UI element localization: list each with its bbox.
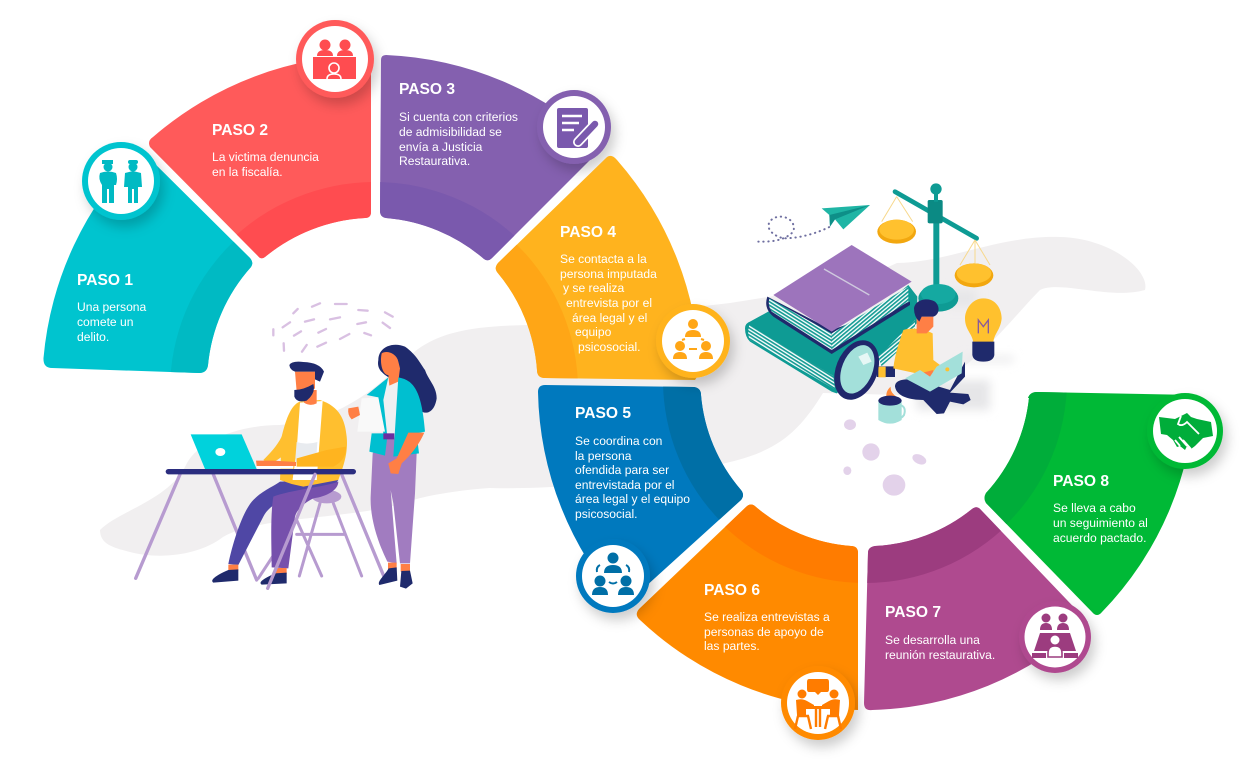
text: paso 6: personas de apoyo de — [704, 625, 824, 639]
panel: paso 4 — [496, 156, 740, 390]
decorative purple spots — [843, 419, 928, 496]
illustration: books, scale and student — [745, 183, 1013, 496]
stacked books — [745, 245, 917, 393]
text: paso 4: Se contacta a la — [560, 252, 647, 266]
light bulb — [965, 298, 1002, 362]
text: paso 4: entrevista por el — [566, 296, 652, 310]
text: paso 3: Si cuenta con criterios — [399, 110, 518, 124]
text: paso 4: persona imputada — [560, 267, 657, 281]
woman — [348, 345, 437, 589]
illustration: man and woman at desk — [136, 303, 437, 589]
desk — [166, 469, 356, 588]
text: paso 3: Restaurativa. — [399, 154, 470, 168]
heading: paso 1: PASO 1 — [77, 272, 133, 289]
text: paso 7: reunión restaurativa. — [885, 648, 995, 662]
stool — [258, 490, 362, 578]
paper plane — [758, 205, 870, 242]
desk rear legs — [136, 474, 384, 580]
text: paso 4: equipo — [575, 325, 612, 339]
heading: paso 7: PASO 7 — [885, 604, 941, 621]
segment: paso 6 — [637, 504, 858, 710]
text: paso 8: Se lleva a cabo — [1053, 501, 1136, 515]
segment: paso 8 — [984, 392, 1195, 615]
man — [212, 362, 347, 585]
panel: paso 3 — [380, 55, 620, 260]
icon: officers — [82, 142, 160, 220]
panel: paso 2 — [149, 20, 382, 258]
laptop — [191, 434, 257, 469]
text: paso 8: acuerdo pactado. — [1053, 531, 1146, 545]
text: paso 3: envía a Justicia — [399, 140, 483, 154]
icon: three people network, paso 4 — [656, 304, 730, 378]
icon: fiscalía desk — [296, 20, 374, 98]
segment: paso 3 — [380, 55, 603, 260]
background blob — [100, 237, 1145, 556]
text: paso 6: las partes. — [704, 639, 760, 653]
text: paso 5: área legal y el equipo — [575, 492, 690, 506]
segment: paso 1 — [43, 150, 252, 373]
text: paso 6: Se realiza entrevistas a — [704, 610, 830, 624]
text: paso 8: un seguimiento al — [1053, 516, 1148, 530]
panel: paso 6 — [636, 504, 864, 752]
heading: paso 2: PASO 2 — [212, 122, 268, 139]
segment: paso 4 — [496, 156, 700, 380]
segment: paso 5 — [538, 385, 743, 607]
text: paso 4: área legal y el — [572, 311, 647, 325]
icon: three people network, paso 5 — [576, 539, 650, 613]
text: paso 1: delito. — [77, 330, 109, 344]
text: paso 3: de admisibilidad se — [399, 125, 502, 139]
icon: handshake — [1147, 393, 1223, 469]
balance scale — [877, 183, 993, 312]
panel: paso 7 — [864, 507, 1100, 710]
soft shadows — [917, 290, 1013, 410]
panel: paso 8 — [984, 392, 1232, 615]
icon: two people talking — [781, 666, 855, 740]
panel: paso 1 — [43, 142, 252, 373]
student — [893, 299, 971, 414]
heading: paso 4: PASO 4 — [560, 224, 616, 241]
text: paso 5: ofendida para ser — [575, 463, 669, 477]
text: paso 1: Una persona — [77, 300, 147, 314]
text: paso 5: la persona — [575, 449, 632, 463]
heading: paso 5: PASO 5 — [575, 405, 631, 422]
segment: paso 7 — [864, 507, 1088, 710]
panel: paso 5 — [538, 385, 743, 584]
text: paso 4: psicosocial. — [578, 340, 641, 354]
text: paso 4: y se realiza — [563, 281, 624, 295]
coffee mug — [878, 387, 905, 424]
magnifying glass — [826, 334, 895, 406]
icon: restorative meeting — [1019, 601, 1091, 673]
text: paso 1: comete un — [77, 315, 133, 329]
thought dashes — [273, 303, 393, 352]
text: paso 2: en la fiscalía. — [212, 165, 283, 179]
text: paso 2: La victima denuncia — [212, 150, 319, 164]
heading: paso 3: PASO 3 — [399, 81, 455, 98]
text: paso 7: Se desarrolla una — [885, 633, 980, 647]
icon: document and pen — [537, 90, 611, 164]
text: paso 5: entrevistada por el — [575, 478, 674, 492]
segment: paso 2 — [149, 55, 371, 258]
text: paso 5: psicosocial. — [575, 507, 638, 521]
text: paso 5: Se coordina con — [575, 434, 662, 448]
heading: paso 6: PASO 6 — [704, 582, 760, 599]
heading: paso 8: PASO 8 — [1053, 473, 1109, 490]
